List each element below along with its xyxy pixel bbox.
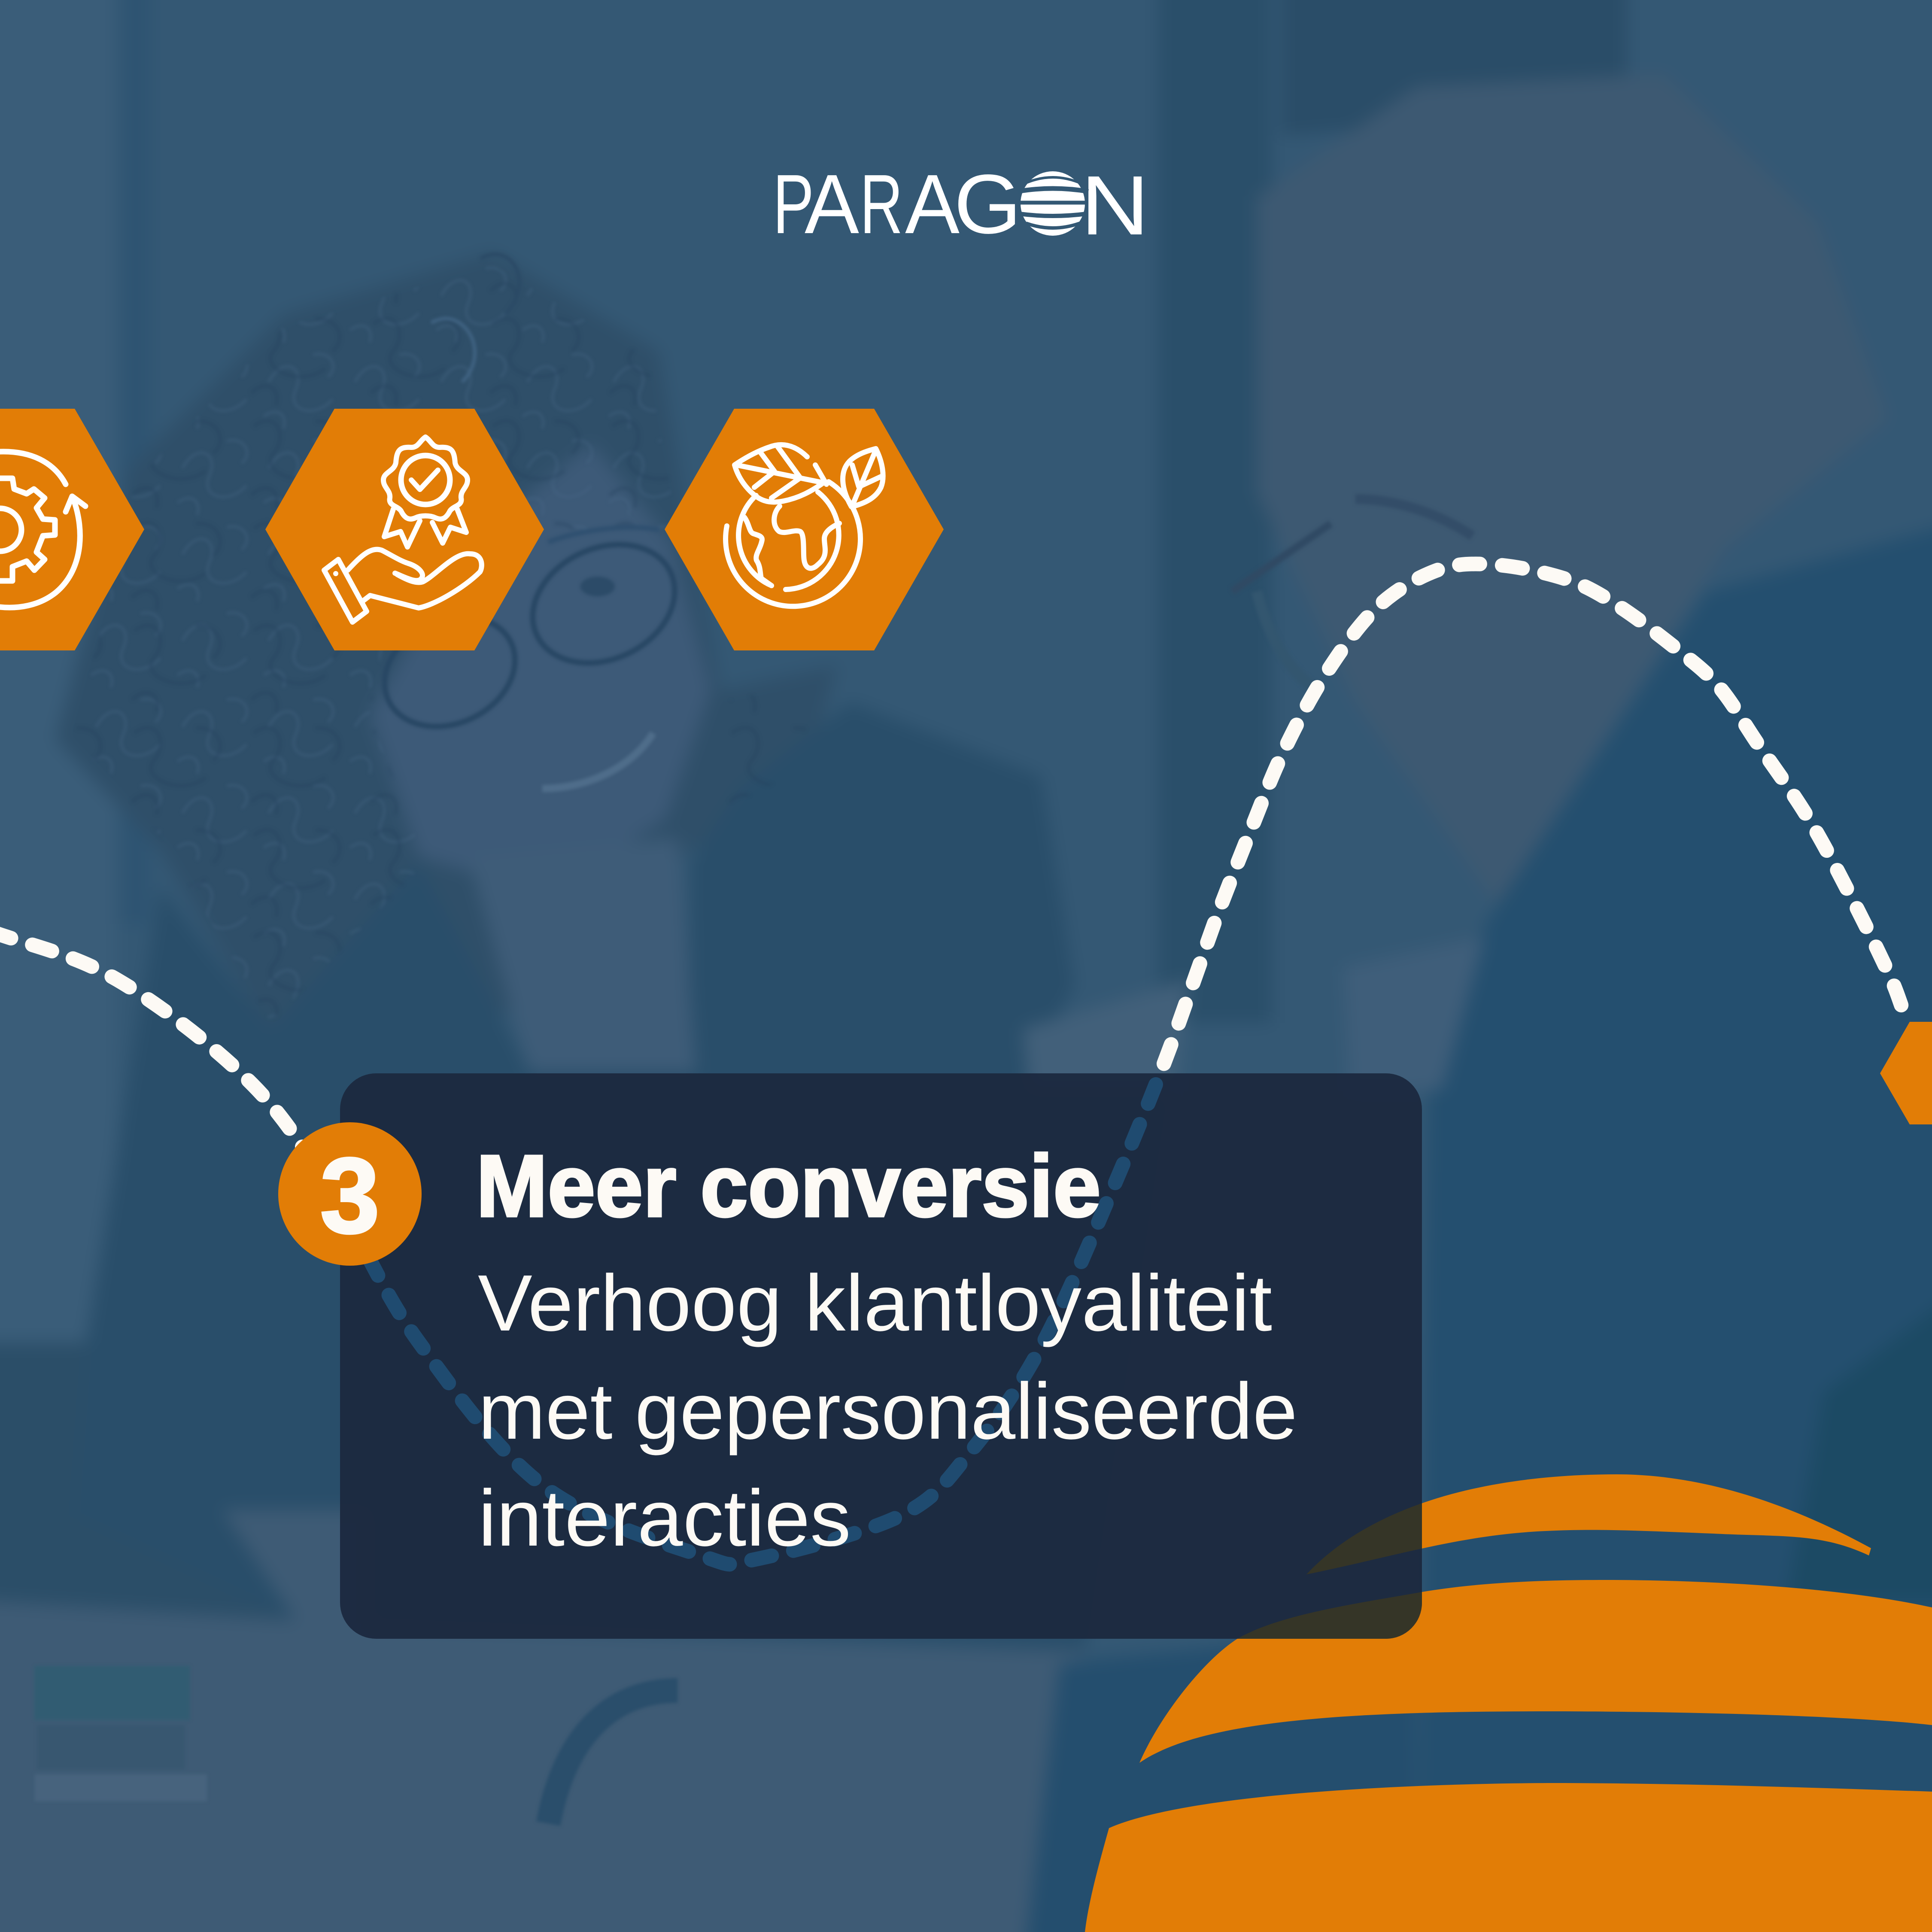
icon hexagon: hand holding quality medal [265,409,544,650]
logo: PARAGON: A [805,157,859,251]
band: middle [1139,1580,1932,1763]
heading: Meer conversie [476,1137,1101,1235]
icon hexagon: gear with cycle arrow [0,409,144,650]
panel: text card [340,1073,1422,1639]
icon hexagon: earth with leaves [665,409,944,650]
logo: PARAGON [773,157,1149,252]
band: bottom [1085,1783,1932,1932]
logo: PARAGON: P [773,157,814,251]
orange abstract globe bands [1085,1474,1932,1932]
dashed journey path [0,564,1905,1564]
logo: PARAGON: A [905,157,960,251]
logo: PARAGON: O [1018,157,1087,251]
band: top [1306,1474,1871,1574]
logo: PARAGON: G [954,157,1021,251]
body text: met gepersonaliseerde [478,1367,1297,1456]
logo: PARAGON: N [1081,158,1149,252]
body text: Verhoog klantloyaliteit [478,1259,1272,1348]
next-step hexagon cropped at right edge [1880,1022,1932,1124]
body text: interacties [478,1474,851,1563]
step number badge [278,1122,422,1266]
body text [478,1259,1297,1563]
orange bands seen through the card [1237,1503,1422,1639]
dashed path seen through the card [364,1077,1163,1571]
step number badge: 3 [320,1136,380,1255]
logo: PARAGON: R [860,157,903,251]
